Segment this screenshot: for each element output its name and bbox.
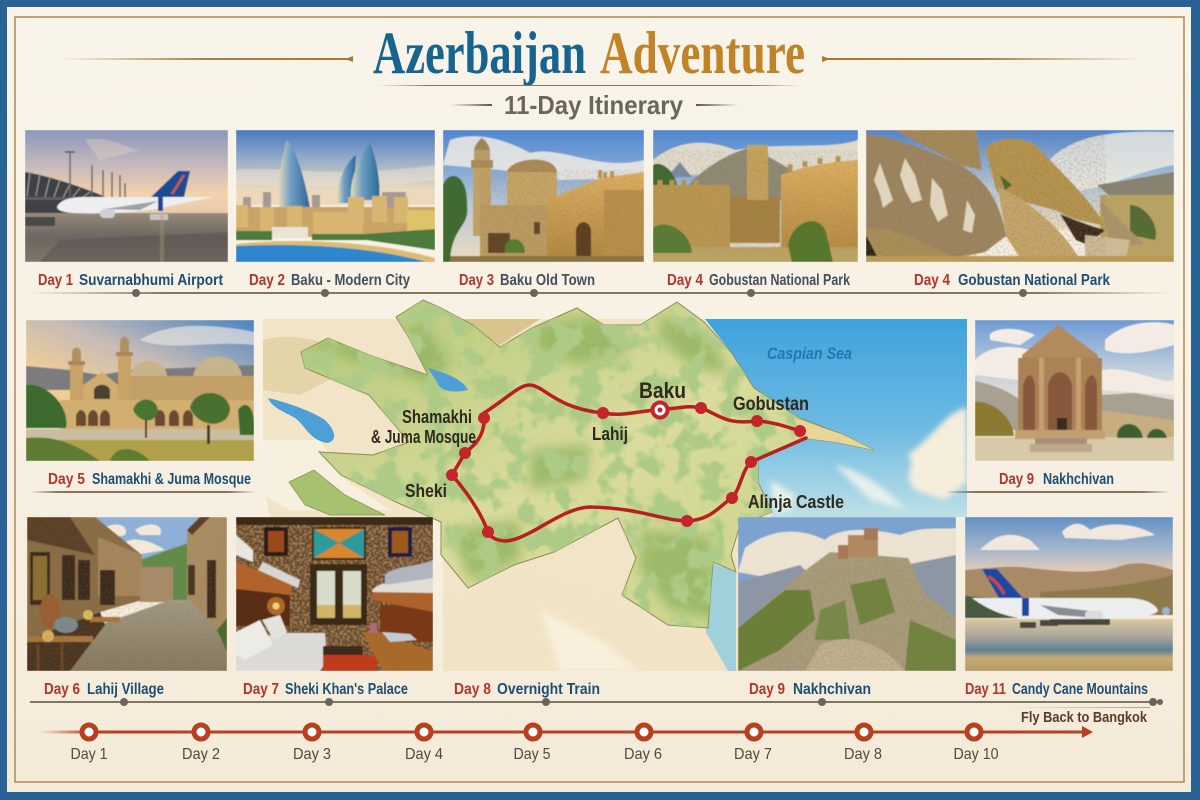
- lake Van: [268, 398, 334, 443]
- caption: Day 2 Baku Modern City: Day 2: [249, 272, 285, 289]
- timeline day labels: Day 3: [293, 746, 331, 763]
- caption: Day 7 Sheki Khan's Palace: Day 7: [243, 681, 279, 698]
- caption: Day 8 Overnight Train: [454, 681, 600, 698]
- route stops: [446, 402, 806, 538]
- caption: Day 4 Gobustan National Park: [667, 272, 850, 289]
- photo: Alinja Castle: [738, 517, 956, 671]
- title right ornament line: [822, 56, 1142, 62]
- caption: Day 6 Lahij Village: Lahij Village: [87, 681, 164, 698]
- map label Lahij: Lahij: [592, 424, 628, 444]
- caption: Day 9 Nakhchivan: [749, 681, 871, 698]
- map label Alinja Castle: Alinja Castle: [748, 492, 844, 512]
- title: Azerbaijan: [373, 20, 586, 86]
- timeline day labels: Day 6: [624, 746, 662, 763]
- map land base: [263, 319, 967, 671]
- map label Shamakhi: Shamakhi: [402, 407, 472, 427]
- row 1 connector line with dots: [30, 289, 1170, 297]
- caption: Day 4 Gobustan National Park second: [914, 272, 1110, 289]
- timeline day labels: Day 8: [844, 746, 882, 763]
- Caspian Sea water: [705, 319, 967, 517]
- timeline day labels: [70, 746, 999, 763]
- title: Adventure: [600, 20, 805, 86]
- country shape: [301, 300, 874, 628]
- map label Sheki: Sheki: [405, 481, 447, 501]
- caption: Day 8 Overnight Train: Day 8: [454, 681, 491, 698]
- caption: Day 2 Baku Modern City: [249, 272, 410, 289]
- caption: Day 9 Nakhchivan right: Day 9: [999, 471, 1034, 488]
- caption: Day 4 Gobustan National Park second: Gobustan National Park: [958, 272, 1110, 289]
- map of Azerbaijan: [263, 300, 967, 671]
- map label Caspian Sea: Caspian Sea: [767, 344, 852, 363]
- map label Baku: Baku: [639, 378, 686, 403]
- timeline day labels: Day 7: [734, 746, 772, 763]
- timeline day labels: Day 5: [514, 746, 551, 763]
- photo: Baku Old Town: [443, 130, 644, 262]
- caption: Day 3 Baku Old Town: Baku Old Town: [500, 272, 595, 289]
- caption: Day 8 Overnight Train: Overnight Train: [497, 681, 600, 698]
- caption: Day 4 Gobustan National Park second: Day 4: [914, 272, 950, 289]
- caption: Day 3 Baku Old Town: Day 3: [459, 272, 494, 289]
- caption: Day 1 Suvarnabhumi Airport: [38, 272, 224, 289]
- photo: Shamakhi Juma Mosque: [26, 320, 254, 461]
- caption: Day 9 Nakhchivan: Day 9: [749, 681, 785, 698]
- caption: Day 11 Candy Cane Mountains: Candy Cane Mountains: [1012, 681, 1148, 698]
- bottom timeline arrow: [40, 725, 1093, 739]
- timeline day labels: Day 10: [954, 746, 999, 763]
- photo: Nakhchivan mausoleum: [975, 320, 1174, 461]
- photo: Gobustan petroglyph rocks: [866, 130, 1174, 262]
- caption: Day 9 Nakhchivan: Nakhchivan: [793, 681, 871, 698]
- photo: Gobustan fortress walls: [653, 130, 858, 262]
- red route: [452, 385, 806, 541]
- photo: Candy Cane Mountains airport: [965, 517, 1173, 671]
- map label Juma Mosque: & Juma Mosque: [371, 427, 476, 447]
- title left ornament line: [60, 56, 353, 62]
- caption: Day 6 Lahij Village: [44, 681, 164, 698]
- caption: Day 3 Baku Old Town: [459, 272, 595, 289]
- caption: Day 5 Shamakhi and Juma Mosque: Shamakhi & Juma Mosque: [92, 471, 251, 488]
- caption: Day 11 Candy Cane Mountains: Day 11: [965, 681, 1006, 698]
- caption: Day 5 Shamakhi and Juma Mosque: [48, 471, 251, 488]
- timeline markers: [82, 725, 981, 739]
- photo: Overnight train cabin: [236, 517, 433, 671]
- forest green patches: [305, 315, 730, 620]
- row 3 connector line with dots: [30, 698, 1163, 706]
- caption: Day 9 Nakhchivan right: Nakhchivan: [1043, 471, 1114, 488]
- timeline day labels: Day 4: [405, 746, 443, 763]
- lesser enclave: [289, 470, 385, 515]
- timeline day labels: Day 2: [182, 746, 220, 763]
- caption: Day 4 Gobustan National Park: Day 4: [667, 272, 703, 289]
- caption: Day 5 Shamakhi and Juma Mosque: Day 5: [48, 471, 85, 488]
- caption: Day 7 Sheki Khan's Palace: [243, 681, 408, 698]
- caption: Day 9 Nakhchivan right: [999, 471, 1114, 488]
- caption: Day 1 Suvarnabhumi Airport: Suvarnabhumi Airport: [79, 272, 224, 289]
- label: Fly Back to Bangkok: Fly Back to Bangkok: [1021, 709, 1148, 726]
- photo: Baku Flame Towers: [236, 130, 435, 262]
- photo: Lahij Village street: [27, 517, 227, 671]
- caption: Day 6 Lahij Village: Day 6: [44, 681, 80, 698]
- lake Sevan: [428, 368, 468, 391]
- photo: Suvarnabhumi Airport: [25, 130, 228, 262]
- caption: Day 2 Baku Modern City: Baku - Modern City: [291, 272, 410, 289]
- timeline day labels: Day 1: [70, 746, 108, 763]
- caption: Day 4 Gobustan National Park: Gobustan National Park: [709, 272, 850, 289]
- Baku marker: [652, 402, 668, 418]
- caption: Day 11 Candy Cane Mountains: [965, 681, 1148, 698]
- title: [373, 20, 805, 86]
- caption: Day 1 Suvarnabhumi Airport: Day 1: [38, 272, 73, 289]
- caption: Day 7 Sheki Khan's Palace: Sheki Khan's Palace: [285, 681, 408, 698]
- map label Gobustan: Gobustan: [733, 394, 809, 415]
- subtitle: 11-Day Itinerary: [504, 90, 683, 120]
